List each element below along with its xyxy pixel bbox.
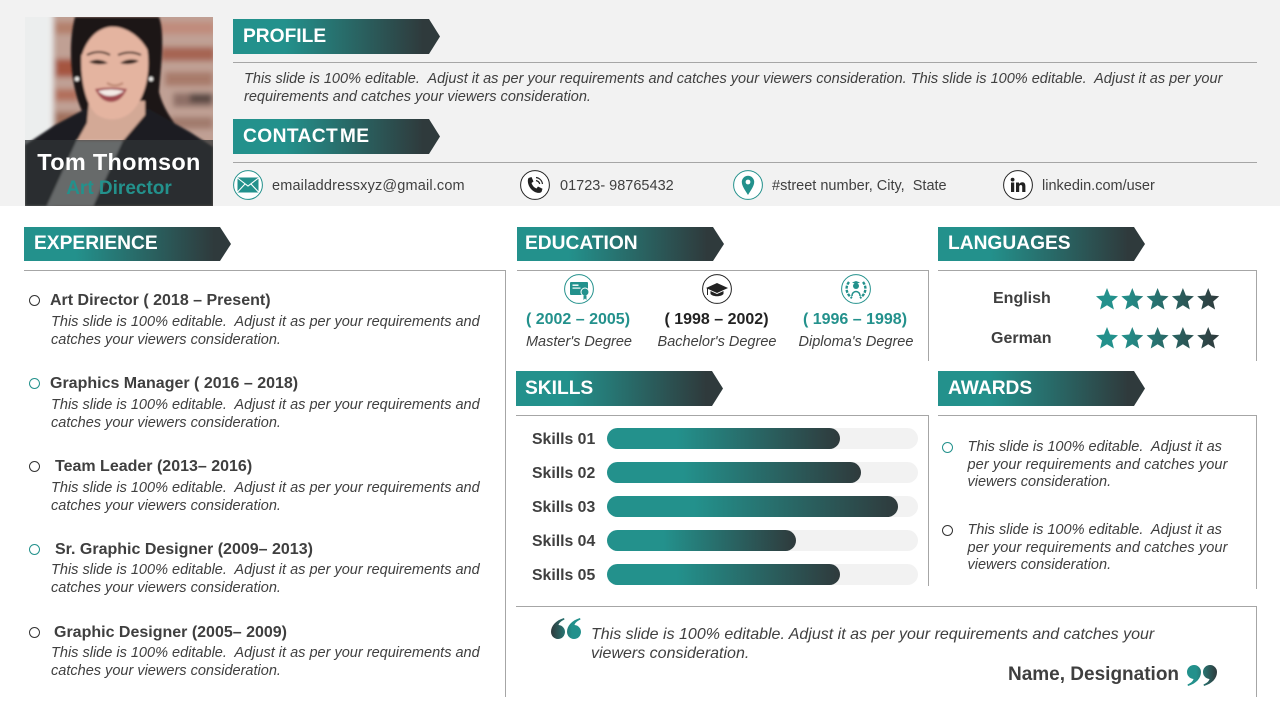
job: art director bbox=[50, 292, 480, 348]
brows bbox=[87, 52, 110, 55]
contact: linkedin: linkedin.com/user bbox=[1042, 178, 1155, 194]
skill bar 3 bbox=[607, 496, 918, 517]
job: graphic designer bbox=[51, 624, 480, 679]
marker bbox=[29, 461, 40, 472]
heading: education: EDUCATION bbox=[525, 233, 638, 254]
job: graphic designer: This slide is 100% editable. Adjust it as per your requirements and bbox=[51, 645, 480, 661]
job: sr graphic designer: This slide is 100% editable. Adjust it as per your requirements and bbox=[51, 562, 480, 578]
job: graphic designer: Graphic Designer (2005– 2009) bbox=[54, 624, 287, 641]
icon: closing quote bbox=[1187, 665, 1217, 686]
dates: master's: ( 2002 – 2005) bbox=[526, 311, 630, 328]
degree: bachelor's: Bachelor's Degree bbox=[658, 334, 776, 350]
quote text bbox=[591, 626, 1155, 662]
job: team leader: This slide is 100% editable. Adjust it as per your requirements and bbox=[51, 480, 480, 496]
jacket bbox=[25, 109, 213, 206]
award 2 text: This slide is 100% editable. Adjust it as bbox=[968, 522, 1222, 538]
heading: profile: PROFILE bbox=[243, 26, 326, 47]
quote text: viewers consideration. bbox=[591, 645, 749, 662]
heading: experience bbox=[24, 227, 231, 261]
panel: experience bbox=[24, 227, 506, 697]
eyes bbox=[89, 60, 108, 64]
heading: skills bbox=[516, 371, 723, 406]
face bbox=[81, 25, 148, 119]
skill bar 4 bbox=[607, 530, 918, 551]
award 1 text: per your requirements and catches your bbox=[968, 457, 1228, 473]
icon: master's certificate bbox=[564, 274, 594, 304]
shirt bbox=[47, 140, 123, 206]
job: graphic designer: catches your viewers consideration. bbox=[51, 663, 281, 679]
dates: diploma: ( 1996 – 1998) bbox=[803, 311, 907, 328]
heading: languages: LANGUAGES bbox=[948, 233, 1071, 254]
job title: Art Director bbox=[66, 178, 172, 199]
contact: address: #street number, City, State bbox=[772, 178, 947, 194]
job: graphics manager: This slide is 100% editable. Adjust it as per your requirements and bbox=[51, 397, 480, 413]
job: graphics manager bbox=[50, 375, 480, 431]
award 2 text bbox=[967, 522, 1228, 573]
skill label 2: Skills 02 bbox=[532, 465, 595, 482]
attribution: Name, Designation bbox=[1008, 664, 1179, 685]
heading: education bbox=[517, 227, 724, 261]
marker bbox=[942, 525, 953, 536]
dates: bachelor's: ( 1998 – 2002) bbox=[664, 311, 769, 328]
neck and chest bbox=[77, 101, 145, 141]
skill bar 1 bbox=[607, 428, 918, 449]
job: sr graphic designer bbox=[51, 541, 480, 596]
panel: awards bbox=[938, 371, 1257, 589]
icon: location pin bbox=[733, 170, 763, 200]
text: profile summary: This slide is 100% editable. Adjust it as per your requirements and catches your viewers consideration. This slide is 100% editable. Adjust it as per your bbox=[244, 71, 1222, 87]
heading: contact me bbox=[233, 119, 440, 154]
top profile band bbox=[0, 0, 1280, 206]
skill label 5: Skills 05 bbox=[532, 567, 595, 584]
skill label 3: Skills 03 bbox=[532, 499, 595, 516]
heading: languages bbox=[938, 227, 1145, 261]
text: profile summary: requirements and catches your viewers consideration. bbox=[244, 89, 591, 105]
marker bbox=[29, 627, 40, 638]
icon: linkedin bbox=[1003, 170, 1033, 200]
panel: education bbox=[517, 227, 929, 361]
rating: german stars bbox=[1096, 327, 1220, 348]
marker bbox=[29, 544, 40, 555]
rating: english stars bbox=[1096, 288, 1220, 310]
heading: awards bbox=[938, 371, 1145, 406]
heading: experience: EXPERIENCE bbox=[34, 233, 158, 254]
job: art director: Art Director ( 2018 – Present) bbox=[50, 292, 271, 309]
job: team leader: Team Leader (2013– 2016) bbox=[55, 458, 252, 475]
marker bbox=[29, 295, 40, 306]
award 2 text: viewers consideration. bbox=[968, 557, 1111, 573]
award 1 text: This slide is 100% editable. Adjust it as bbox=[968, 439, 1222, 455]
mouth bbox=[95, 88, 127, 102]
heading: awards: AWARDS bbox=[948, 378, 1032, 399]
skill label 4: Skills 04 bbox=[532, 533, 595, 550]
icon: phone bbox=[520, 170, 550, 200]
quote text: This slide is 100% editable. Adjust it as per your requirements and catches your bbox=[591, 626, 1154, 643]
heading: contact me: CONTACT ME bbox=[243, 126, 369, 147]
job: team leader: catches your viewers consideration. bbox=[51, 498, 281, 514]
portrait illustration bbox=[25, 17, 213, 206]
degree: diploma: Diploma's Degree bbox=[799, 334, 913, 350]
photo: portrait with name plate bbox=[25, 17, 213, 206]
job: graphics manager: Graphics Manager ( 2016 – 2018) bbox=[50, 375, 298, 392]
hair bbox=[71, 17, 187, 139]
award 1 text bbox=[967, 439, 1228, 490]
job: art director: This slide is 100% editable. Adjust it as per your requirements and bbox=[51, 314, 480, 330]
heading: profile bbox=[233, 19, 440, 54]
name: Tom Thomson bbox=[37, 149, 201, 175]
skill label 1: Skills 01 bbox=[532, 431, 595, 448]
contact: phone: 01723- 98765432 bbox=[560, 178, 674, 194]
icon: diploma laurel bbox=[841, 274, 871, 304]
skill bar 5 bbox=[607, 564, 918, 585]
text: profile summary bbox=[244, 71, 1223, 105]
heading: skills: SKILLS bbox=[525, 378, 593, 399]
earrings bbox=[75, 77, 79, 81]
job: sr graphic designer: Sr. Graphic Designer (2009– 2013) bbox=[55, 541, 313, 558]
contact: email: emailaddressxyz@gmail.com bbox=[272, 178, 465, 194]
label: english: English bbox=[993, 290, 1051, 307]
icon: bachelor's cap bbox=[702, 274, 732, 304]
hair fringe bbox=[75, 17, 157, 55]
panel: testimonial quote bbox=[516, 606, 1257, 697]
panel: languages bbox=[938, 227, 1257, 361]
icon: opening quote bbox=[551, 618, 581, 639]
job: graphics manager: catches your viewers consideration. bbox=[51, 415, 281, 431]
label: german: German bbox=[991, 330, 1051, 347]
nose bbox=[107, 83, 123, 86]
marker bbox=[942, 442, 953, 453]
job: sr graphic designer: catches your viewers consideration. bbox=[51, 580, 281, 596]
name plate overlay bbox=[25, 140, 213, 206]
job: team leader bbox=[51, 458, 480, 514]
award 1 text: viewers consideration. bbox=[968, 474, 1111, 490]
award 2 text: per your requirements and catches your bbox=[968, 540, 1228, 556]
skill bar 2 bbox=[607, 462, 918, 483]
icon: email bbox=[233, 170, 263, 200]
job: art director: catches your viewers consideration. bbox=[51, 332, 281, 348]
degree: master's: Master's Degree bbox=[526, 334, 632, 350]
marker bbox=[29, 378, 40, 389]
